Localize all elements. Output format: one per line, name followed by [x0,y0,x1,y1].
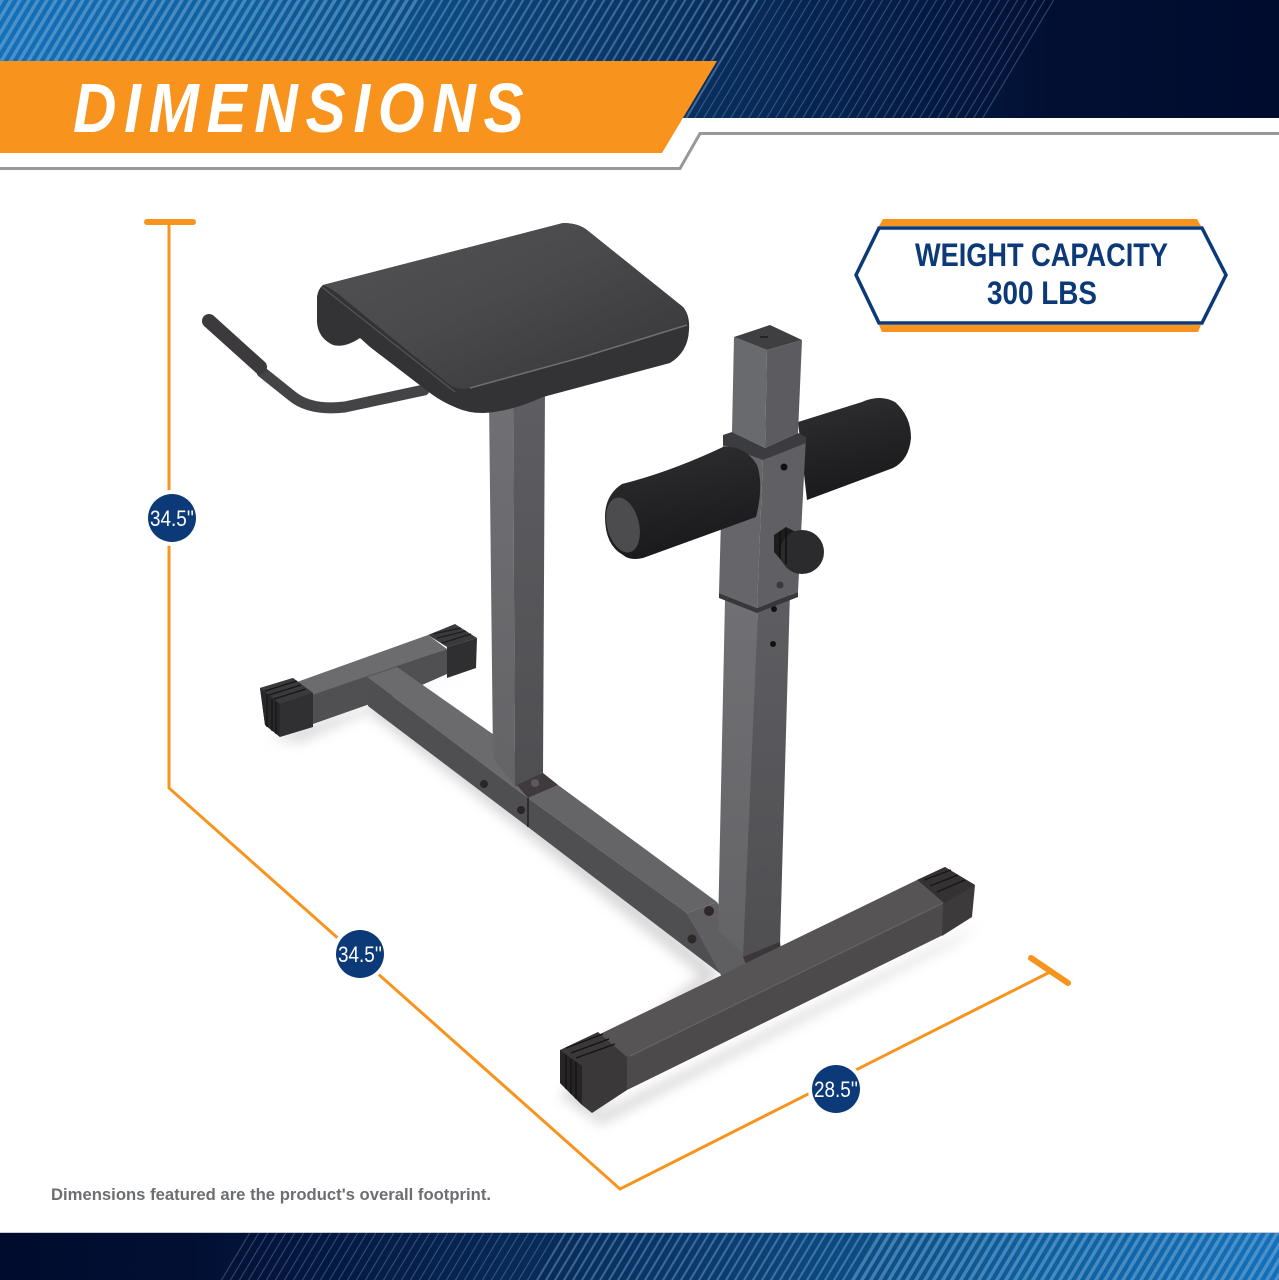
product: roman chair hyperextension bench [209,223,980,1125]
header grey rule [0,134,1279,168]
weight capacity callout: 300 LBS [987,275,1097,311]
front upright [718,592,790,964]
rear foot crossbar [260,624,477,737]
title: DIMENSIONS [73,69,524,147]
main beam front section [517,773,752,977]
upper adjustment post [732,325,802,448]
handle bar [209,321,424,408]
rear foam roller [798,398,911,500]
dimension badge: height [144,490,200,546]
title banner [0,61,717,153]
front foot crossbar [560,867,975,1113]
seat support post [489,388,545,787]
seat pad [317,223,689,413]
footnote: Dimensions featured are the product's overall footprint. [51,1185,491,1204]
weight capacity callout: WEIGHT CAPACITY [915,237,1168,273]
dimension lines [147,222,1068,1189]
weight capacity callout [856,219,1226,332]
sliding collar [719,432,806,613]
front foam roller [601,447,760,559]
dimension badge: height: 34.5'' [150,506,194,531]
dimension badge: length: 34.5'' [338,942,382,967]
dimension badge: width: 28.5'' [814,1077,858,1102]
adjustment knob [774,527,824,574]
dimension badge: width [808,1061,864,1117]
header band [0,0,1279,118]
dimension badge: length [332,926,388,982]
roller end cap [601,494,645,556]
footer band [0,1232,1279,1280]
main beam rear section [367,667,558,827]
floor shadows [270,670,980,1125]
